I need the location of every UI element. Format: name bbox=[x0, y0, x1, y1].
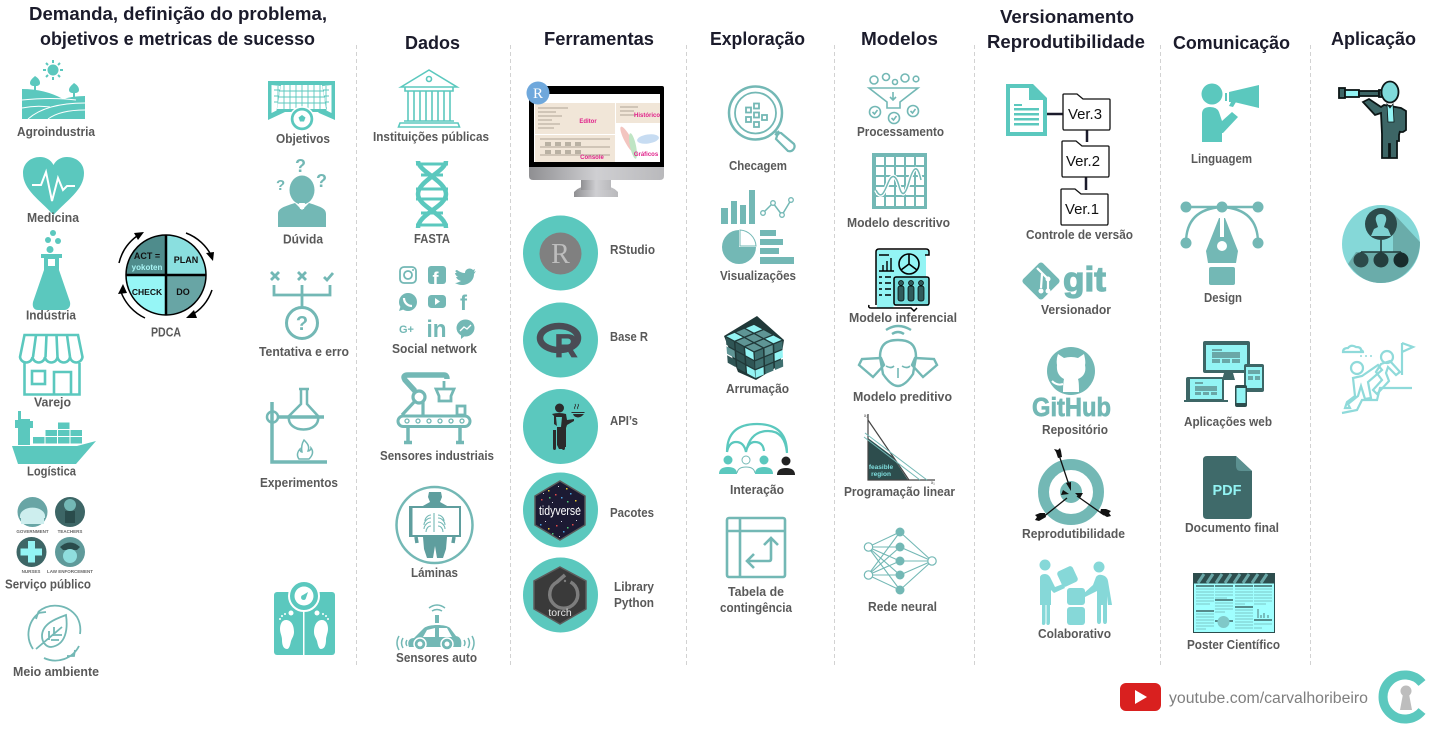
icon: monitor rstudio: Histórico bbox=[634, 113, 660, 119]
icon: organograma bbox=[1342, 205, 1420, 283]
heading: aplicacao: Aplicação bbox=[1331, 29, 1416, 49]
chart: pdca cycle: yokoten bbox=[132, 263, 162, 272]
icon: medicina bbox=[23, 157, 84, 215]
logo: carvalho ribeiro bbox=[1383, 675, 1422, 719]
icon: duvida: ? bbox=[276, 177, 285, 194]
icon: varejo bbox=[20, 335, 82, 394]
icon: tidyverse: tidyverse bbox=[539, 504, 581, 518]
label: processamento: Processamento bbox=[857, 125, 944, 139]
label: servico publico: Serviço público bbox=[5, 578, 91, 592]
label: repositorio: Repositório bbox=[1042, 423, 1108, 437]
label: logistica: Logística bbox=[27, 464, 77, 478]
icon: git bbox=[1021, 261, 1106, 301]
icon: controle de versao bbox=[1006, 84, 1110, 225]
chart: programacao linear: x₂ bbox=[864, 413, 868, 418]
icon: monitor rstudio: Editor bbox=[579, 119, 597, 125]
icon: social network: f bbox=[460, 292, 468, 315]
icon: github bbox=[1032, 347, 1111, 422]
icon: linguagem bbox=[1202, 84, 1259, 142]
label: visualizacoes: Visualizações bbox=[720, 269, 796, 283]
icon: checagem bbox=[729, 86, 795, 151]
chart: pdca cycle: PLAN bbox=[174, 255, 198, 265]
icon: experimentos bbox=[267, 389, 327, 462]
icon: interacao bbox=[719, 424, 795, 475]
label: pdca: PDCA bbox=[151, 326, 181, 340]
label: varejo: Varejo bbox=[34, 396, 71, 410]
label: base r: Base R bbox=[610, 330, 648, 344]
heading: ferramentas: Ferramentas bbox=[544, 29, 654, 49]
icon: social network: f bbox=[432, 269, 440, 289]
label: meio ambiente: Meio ambiente bbox=[13, 665, 99, 679]
label: library python bbox=[614, 580, 654, 610]
label: library python: Library bbox=[614, 580, 654, 594]
label: aplicacoes web: Aplicações web bbox=[1184, 415, 1272, 429]
icon: agroindustria bbox=[22, 60, 85, 119]
icon: laminas bbox=[396, 487, 472, 563]
label: rede neural: Rede neural bbox=[868, 600, 937, 614]
icon: api bbox=[523, 389, 598, 464]
icon: tentativa e erro: ? bbox=[296, 313, 308, 335]
icon: base r bbox=[523, 302, 598, 378]
chart: pdca cycle: DO bbox=[176, 287, 190, 297]
label: reprodutibilidade: Reprodutibilidade bbox=[1022, 527, 1125, 541]
icon: modelo preditivo bbox=[859, 326, 937, 386]
icon: design bbox=[1180, 202, 1264, 285]
icon: modelo descritivo bbox=[872, 153, 927, 209]
icon: rstudio bbox=[523, 216, 598, 290]
label: sensores industriais: Sensores industriais bbox=[380, 449, 494, 463]
panel: dados bbox=[373, 33, 494, 665]
icon: meio ambiente bbox=[28, 606, 80, 661]
chart: pdca cycle bbox=[118, 232, 214, 318]
icon: documento pdf: PDF bbox=[1212, 483, 1242, 499]
chart: programacao linear: x₁ bbox=[931, 480, 935, 485]
icon: objetivos bbox=[268, 81, 335, 131]
heading: exploracao: Exploração bbox=[710, 29, 805, 49]
icon: social network bbox=[399, 266, 476, 343]
icon: poster cientifico bbox=[1194, 574, 1274, 632]
icon: escaladores bbox=[1342, 343, 1413, 413]
icon: social network: G+ bbox=[399, 324, 414, 336]
label: programacao linear: Programação linear bbox=[844, 485, 955, 499]
panel: modelos bbox=[844, 29, 957, 614]
label: laminas: Láminas bbox=[411, 566, 458, 580]
icon: processamento bbox=[869, 74, 919, 124]
icon: fasta bbox=[416, 161, 448, 228]
label: interacao: Interação bbox=[730, 483, 784, 497]
icon: torch bbox=[523, 558, 598, 632]
panel: versionamento bbox=[987, 7, 1145, 641]
icon: modelo inferencial bbox=[869, 249, 929, 311]
icon: git: git bbox=[1063, 261, 1106, 299]
panel: aplicacao bbox=[1331, 29, 1420, 413]
icon: visualizacoes bbox=[721, 190, 794, 264]
icon: servico publico bbox=[16, 497, 93, 574]
icon: colaborativo bbox=[1040, 560, 1112, 625]
heading: versionamento reprodutibilidade: Reprodutibilidade bbox=[987, 32, 1145, 52]
label: modelo preditivo: Modelo preditivo bbox=[853, 390, 952, 404]
label: agroindustria: Agroindustria bbox=[17, 125, 96, 139]
icon: youtube bbox=[1120, 683, 1161, 711]
icon: monitor rstudio: Gráficos bbox=[634, 152, 659, 158]
link text: youtube: youtube.com/carvalhoribeiro bbox=[1169, 690, 1368, 707]
label: documento final: Documento final bbox=[1185, 521, 1279, 535]
label: fasta: FASTA bbox=[414, 232, 450, 246]
panel: comunicacao bbox=[1173, 33, 1290, 652]
label: instituicoes publicas: Instituições públicas bbox=[373, 130, 489, 144]
icon: logistica bbox=[12, 411, 96, 464]
label: experimentos: Experimentos bbox=[260, 476, 338, 490]
icon: balanca bbox=[274, 581, 335, 655]
icon: duvida: ? bbox=[295, 156, 306, 176]
icon: sensores industriais bbox=[398, 375, 470, 442]
chart: pdca cycle: ACT = bbox=[134, 251, 160, 261]
panel: ferramentas bbox=[523, 29, 664, 632]
icon: rstudio: R bbox=[551, 239, 570, 270]
label: design: Design bbox=[1204, 291, 1242, 305]
label: checagem: Checagem bbox=[729, 159, 787, 173]
label: social network: Social network bbox=[392, 342, 477, 356]
icon: monitor rstudio: R bbox=[533, 86, 543, 102]
icon: servico publico: LAW ENFORCEMENT bbox=[47, 569, 93, 574]
label: medicina: Medicina bbox=[27, 211, 80, 225]
icon: aplicacoes web bbox=[1184, 341, 1264, 407]
icon: servico publico: TEACHERS bbox=[58, 529, 82, 534]
heading: demanda: objetivos e metricas de sucesso bbox=[40, 29, 315, 49]
label: controle de versao: Controle de versão bbox=[1026, 228, 1133, 242]
icon: instituicoes publicas bbox=[398, 70, 460, 127]
label: poster cientifico: Poster Científico bbox=[1187, 638, 1280, 652]
label: versionador: Versionador bbox=[1041, 303, 1111, 317]
heading: versionamento reprodutibilidade bbox=[987, 7, 1145, 52]
heading: versionamento reprodutibilidade: Versionamento bbox=[1000, 7, 1134, 27]
chart: programacao linear: region bbox=[871, 471, 891, 478]
panel: exploracao bbox=[710, 29, 805, 615]
icon: torch: torch bbox=[548, 607, 572, 619]
label: duvida: Dúvida bbox=[283, 232, 324, 246]
label: tabela de contingencia: contingência bbox=[720, 601, 793, 615]
footer bbox=[1120, 675, 1422, 719]
label: tabela de contingencia bbox=[720, 585, 793, 615]
label: tabela de contingencia: Tabela de bbox=[728, 585, 784, 599]
label: sensores auto: Sensores auto bbox=[396, 651, 477, 665]
label: rstudio: RStudio bbox=[610, 243, 655, 257]
label: tentativa e erro: Tentativa e erro bbox=[259, 345, 349, 359]
icon: industria bbox=[33, 230, 70, 310]
icon: homem com luneta bbox=[1339, 82, 1406, 158]
icon: base r: R bbox=[554, 328, 578, 364]
icon: duvida bbox=[276, 156, 327, 227]
icon: tentativa e erro bbox=[271, 272, 333, 338]
label: industria: Indústria bbox=[26, 308, 77, 322]
icon: servico publico: NURSES bbox=[22, 569, 40, 574]
icon: reprodutibilidade target bbox=[1035, 448, 1111, 521]
label: modelo inferencial: Modelo inferencial bbox=[849, 311, 957, 325]
label: objetivos: Objetivos bbox=[276, 132, 330, 146]
panel: demanda bbox=[5, 4, 349, 679]
label: api: API’s bbox=[610, 414, 638, 428]
chart: rede neural bbox=[864, 528, 936, 594]
heading: demanda bbox=[29, 4, 327, 49]
icon: sensores auto bbox=[397, 605, 474, 650]
chart: programacao linear: feasible bbox=[869, 464, 893, 471]
icon: github: GitHub bbox=[1032, 394, 1111, 422]
icon: monitor rstudio bbox=[526, 82, 664, 197]
heading: comunicacao: Comunicação bbox=[1173, 33, 1290, 53]
label: pacotes: Pacotes bbox=[610, 506, 654, 520]
icon: duvida: ? bbox=[316, 171, 327, 191]
icon: controle de versao: Ver.1 bbox=[1065, 201, 1099, 218]
icon: monitor rstudio: Console bbox=[580, 155, 604, 161]
label: linguagem: Linguagem bbox=[1191, 152, 1252, 166]
icon: tabela de contingencia bbox=[727, 518, 785, 577]
icon: tidyverse bbox=[523, 472, 598, 548]
chart: pdca cycle: CHECK bbox=[132, 287, 163, 297]
label: library python: Python bbox=[614, 596, 654, 610]
chart: programacao linear bbox=[864, 413, 935, 485]
icon: controle de versao: Ver.2 bbox=[1066, 153, 1100, 170]
label: arrumacao: Arrumação bbox=[726, 382, 789, 396]
heading: dados: Dados bbox=[405, 33, 460, 53]
heading: demanda: Demanda, definição do problema, bbox=[29, 4, 327, 24]
label: modelo descritivo: Modelo descritivo bbox=[847, 216, 950, 230]
icon: servico publico: GOVERNMENT bbox=[16, 529, 49, 534]
icon: documento pdf bbox=[1203, 456, 1252, 519]
icon: social network: in bbox=[426, 316, 446, 343]
label: colaborativo: Colaborativo bbox=[1038, 627, 1111, 641]
heading: modelos: Modelos bbox=[861, 29, 938, 49]
icon: arrumacao rubik cube bbox=[724, 316, 784, 380]
icon: controle de versao: Ver.3 bbox=[1068, 106, 1102, 123]
